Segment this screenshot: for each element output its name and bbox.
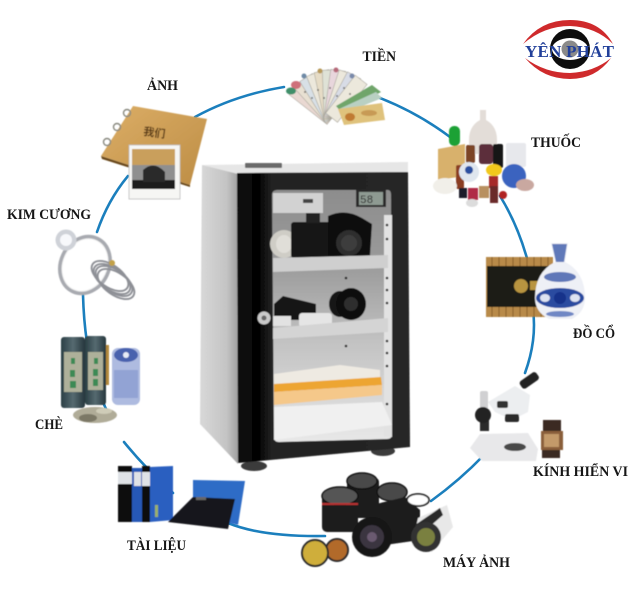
icon: tea cans (61, 336, 140, 423)
dry cabinet (200, 162, 410, 471)
cabinet side and top (200, 162, 408, 464)
shelf two (273, 318, 388, 339)
icon: cameras and lenses (302, 473, 453, 566)
icon: microscope and watch (470, 371, 563, 461)
humidity display: 58 (360, 195, 373, 207)
label: KÍNH HIỂN VI: KÍNH HIỂN VI (533, 462, 628, 480)
icon: photo album: 我们 (142, 123, 166, 142)
lens and pouch on middle shelf (273, 288, 366, 327)
humidity display (356, 190, 386, 207)
label: TIỀN: TIỀN (362, 48, 396, 65)
label: MÁY ẢNH: MÁY ẢNH (443, 554, 510, 571)
cabinet door (237, 172, 410, 463)
cameras on top shelf (270, 212, 372, 258)
door lock (258, 312, 270, 324)
icon: antique scroll and vase (486, 243, 585, 319)
label: THUỐC: THUỐC (531, 133, 581, 151)
label: CHÈ: CHÈ (35, 416, 63, 433)
label: TÀI LIỆU: TÀI LIỆU (127, 537, 186, 554)
blue connecting ring (83, 87, 534, 536)
label: KIM CƯƠNG: KIM CƯƠNG (7, 207, 91, 223)
shelf one (273, 255, 388, 272)
label: ẢNH: ẢNH (147, 77, 178, 94)
label: ĐỒ CỔ: ĐỒ CỔ (573, 324, 615, 342)
icon: photo album (101, 106, 207, 199)
logo: Yên Phát (523, 20, 615, 79)
icon: binders and folders (118, 466, 245, 529)
icon: medicine (433, 110, 534, 207)
tray with orange box on lower shelf (274, 365, 382, 405)
glass window with shelves (270, 190, 392, 442)
logo: Yên Phát: YÊN PHÁT (525, 42, 615, 61)
icon: money notes (286, 68, 385, 125)
icon: diamond rings (51, 229, 140, 305)
cabinet feet (241, 446, 395, 471)
